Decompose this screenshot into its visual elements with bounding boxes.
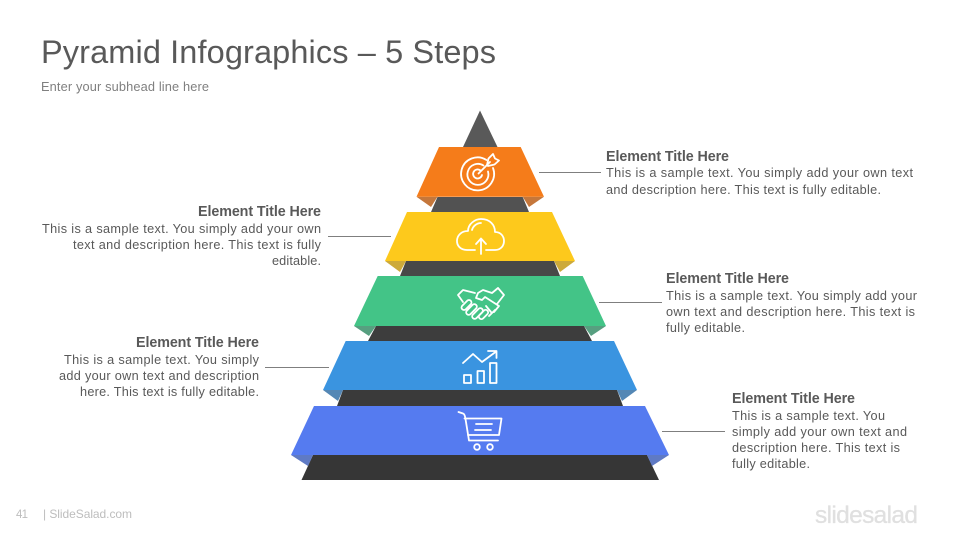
callout 5: bottom right: description here. This text is — [732, 441, 900, 455]
callout 1: top right: This is a sample text. You simply add your own text — [606, 166, 913, 180]
callout 2: upper left: editable. — [272, 254, 321, 268]
icon: growth chart — [463, 351, 496, 383]
icon: handshake — [458, 288, 504, 320]
callout 2: upper left: This is a sample text. You simply add your own — [42, 222, 321, 236]
callout 1: top right — [539, 149, 913, 197]
tier 4: blue chart — [323, 341, 637, 406]
callout 3: middle right: Element Title Here — [666, 271, 789, 287]
callout 4: lower left: here. This text is fully editable. — [80, 385, 259, 399]
tier 2: yellow cloud — [385, 212, 575, 276]
tier 5: periwinkle cart — [291, 406, 669, 480]
icon: target — [461, 154, 499, 190]
footer page number: 41 — [16, 509, 28, 521]
callout 5: bottom right: Element Title Here — [732, 391, 855, 407]
tier 1: orange target — [416, 147, 544, 212]
callout 2: upper left — [42, 204, 391, 268]
callout 5: bottom right: fully editable. — [732, 457, 810, 471]
callout 5: bottom right — [662, 391, 907, 471]
callout 3: middle right: fully editable. — [666, 321, 745, 335]
callout 2: upper left: text and description here. This text is fully — [73, 238, 322, 252]
tier 3: green handshake — [354, 276, 606, 341]
callout 3: middle right — [599, 271, 918, 335]
callout 1: top right: and description here. This text is fully editable. — [606, 183, 881, 197]
pyramid apex — [463, 110, 498, 147]
callout 5: bottom right: simply add your own text and — [732, 425, 907, 439]
callout 3: middle right: own text and description here. This text is — [666, 305, 915, 319]
icon: shopping cart — [458, 412, 502, 450]
callout 4: lower left: add your own text and description — [59, 369, 259, 383]
pyramid — [291, 110, 669, 480]
logo wordmark: slidesalad — [815, 502, 918, 529]
callout 2: upper left: Element Title Here — [198, 204, 321, 220]
subhead: Enter your subhead line here — [41, 79, 209, 94]
callout 3: middle right: This is a sample text. You simply add your — [666, 289, 918, 303]
callout 4: lower left — [59, 335, 329, 399]
callout 1: top right: Element Title Here — [606, 149, 729, 165]
footer source: | SlideSalad.com — [43, 507, 132, 521]
title: Pyramid Infographics – 5 Steps — [41, 34, 496, 70]
callout 4: lower left: This is a sample text. You simply — [64, 353, 260, 367]
callout 5: bottom right: This is a sample text. You — [732, 409, 885, 423]
callout 4: lower left: Element Title Here — [136, 335, 259, 351]
icon: cloud upload — [457, 219, 504, 254]
